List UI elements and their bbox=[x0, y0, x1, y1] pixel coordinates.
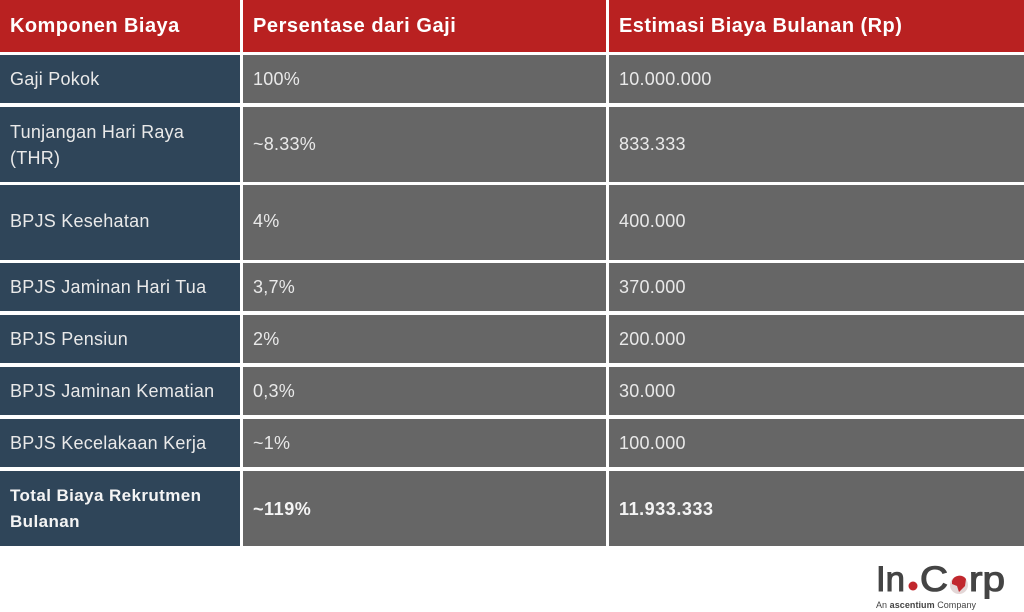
header: salary percentage: Persentase dari Gaji bbox=[253, 15, 456, 37]
row: BPJS Jaminan Kematian: BPJS Jaminan Kematian bbox=[10, 381, 214, 401]
row: THR: (THR) bbox=[10, 148, 60, 168]
header: cost component: Komponen Biaya bbox=[10, 15, 180, 37]
row: BPJS Kecelakaan Kerja: ~1% bbox=[253, 433, 290, 453]
logo wordmark: In bbox=[876, 560, 905, 599]
row: total: Bulanan bbox=[10, 512, 80, 530]
row: BPJS Jaminan Kematian bbox=[0, 367, 1024, 415]
row: base salary: 10.000.000 bbox=[619, 69, 712, 89]
row: BPJS Jaminan Hari Tua: 370.000 bbox=[619, 277, 686, 297]
row: BPJS Kecelakaan Kerja: BPJS Kecelakaan Kerja bbox=[10, 433, 206, 453]
row: BPJS Pensiun: 200.000 bbox=[619, 329, 686, 349]
header: cost component bbox=[0, 0, 240, 52]
row: BPJS Jaminan Hari Tua: 3,7% bbox=[253, 277, 295, 297]
row: base salary: 100% bbox=[253, 69, 300, 89]
header: salary percentage bbox=[243, 0, 606, 52]
row: BPJS Pensiun bbox=[0, 315, 1024, 363]
row: BPJS Kesehatan: 400.000 bbox=[619, 210, 686, 230]
header: monthly cost bbox=[609, 0, 1024, 52]
row: total bbox=[0, 471, 1024, 546]
row: THR bbox=[0, 107, 1024, 182]
row: BPJS Kecelakaan Kerja: 100.000 bbox=[619, 433, 686, 453]
row: BPJS Kesehatan bbox=[0, 185, 1024, 260]
row: BPJS Jaminan Kematian: 30.000 bbox=[619, 381, 676, 401]
row: total: ~119% bbox=[253, 498, 311, 518]
row: base salary bbox=[0, 55, 1024, 103]
logo tagline: An ascentium Company bbox=[876, 600, 976, 610]
row: BPJS Kecelakaan Kerja bbox=[0, 419, 1024, 467]
row: total: Total Biaya Rekrutmen bbox=[10, 486, 201, 504]
row: THR: ~8.33% bbox=[253, 134, 316, 154]
row: THR: Tunjangan Hari Raya bbox=[10, 122, 184, 142]
row: BPJS Pensiun: 2% bbox=[253, 329, 280, 349]
table header row bbox=[0, 0, 1024, 52]
row: total: 11.933.333 bbox=[619, 498, 714, 518]
logo wordmark: C bbox=[920, 560, 948, 599]
row: base salary: Gaji Pokok bbox=[10, 69, 100, 89]
logo wordmark: rp bbox=[969, 560, 1005, 599]
row: BPJS Jaminan Kematian: 0,3% bbox=[253, 381, 295, 401]
logo wordmark bbox=[876, 560, 1005, 599]
header: monthly cost: Estimasi Biaya Bulanan (Rp) bbox=[619, 15, 902, 37]
row: BPJS Kesehatan: BPJS Kesehatan bbox=[10, 210, 150, 230]
row: BPJS Jaminan Hari Tua: BPJS Jaminan Hari Tua bbox=[10, 277, 206, 297]
logo: InCorp bbox=[876, 560, 1005, 610]
row: BPJS Kesehatan: 4% bbox=[253, 210, 280, 230]
row: BPJS Jaminan Hari Tua bbox=[0, 263, 1024, 311]
row: BPJS Pensiun: BPJS Pensiun bbox=[10, 329, 128, 349]
row: THR: 833.333 bbox=[619, 134, 686, 154]
